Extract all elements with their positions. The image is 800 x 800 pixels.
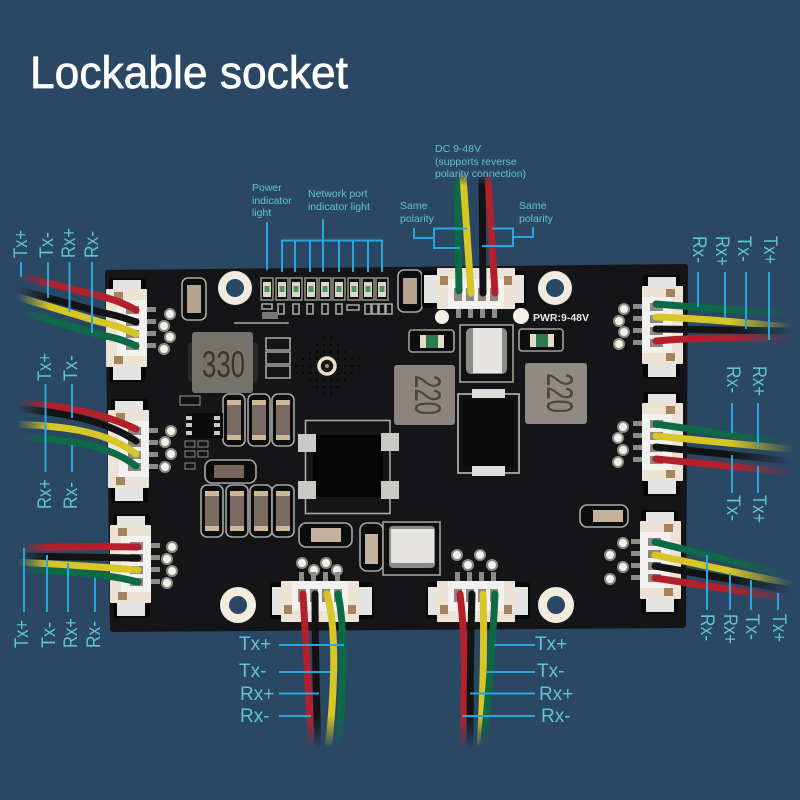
- inductor 220 left: [394, 365, 455, 425]
- labels: same polarity left: [400, 200, 467, 248]
- white capacitor top: [460, 325, 513, 382]
- small status LEDs: [409, 329, 563, 352]
- labels: right upper connector: Tx+: [759, 236, 780, 264]
- panel: circuit board: [108, 267, 685, 629]
- wires: left middle: [15, 403, 136, 466]
- labels: power indicator: light: [252, 207, 271, 219]
- labels: right middle connector: Tx+: [748, 495, 769, 523]
- labels: right middle connector: Rx-: [722, 366, 743, 393]
- labels: DC input: polarity connection): [435, 168, 526, 180]
- labels: left middle connector: Tx+: [35, 353, 56, 381]
- ceramic capacitors row bottom: [201, 485, 294, 537]
- labels: bottom right connector: [462, 634, 573, 727]
- labels: left lower connector: Rx-: [84, 621, 105, 648]
- labels: right upper connector: Rx-: [688, 236, 709, 263]
- labels: bottom right connector: Rx+: [539, 684, 573, 705]
- horizontal capacitor: [205, 460, 256, 483]
- solder pads: [159, 304, 629, 588]
- ceramic capacitors row top: [223, 394, 294, 446]
- labels: right lower connector: Rx+: [719, 614, 740, 644]
- labels: bottom left connector: Tx+: [239, 634, 271, 655]
- labels: DC input: DC 9-48V: [435, 143, 481, 155]
- diode: [458, 389, 519, 476]
- labels: power indicator: indicator: [252, 195, 292, 207]
- labels: left lower connector: Rx+: [61, 618, 82, 648]
- labels: power indicator: [252, 182, 292, 270]
- small IC: [180, 322, 290, 469]
- labels: same polarity right: Same: [519, 200, 547, 212]
- inductor 330: 330: [202, 344, 245, 385]
- labels: network port indicator: Network port: [308, 188, 368, 200]
- labels: bottom right connector: Rx-: [541, 706, 571, 727]
- labels: right lower connector: Rx-: [696, 614, 717, 641]
- indicator LEDs: [261, 278, 392, 319]
- inductor 220 right: 220: [539, 373, 580, 413]
- labels: same polarity left: Same: [400, 200, 428, 212]
- wires: left lower: [15, 547, 138, 582]
- labels: bottom right connector: Tx+: [535, 634, 567, 655]
- inductor 330: [188, 332, 258, 393]
- labels: right lower connector: [696, 555, 789, 644]
- wire fade overlays: [0, 172, 800, 760]
- labels: bottom right connector: Tx-: [537, 661, 564, 682]
- wires: bottom right: [460, 594, 495, 752]
- labels: left upper connector: Rx-: [82, 231, 103, 258]
- capacitor top left: [182, 278, 206, 320]
- labels: same polarity left: polarity: [400, 213, 435, 225]
- mounting holes: [221, 274, 571, 620]
- labels: right lower connector: Tx-: [741, 614, 762, 640]
- PWR marking: PWR:9-48V: [533, 312, 589, 324]
- inductor 220 left: 220: [407, 375, 448, 415]
- wires: left upper: [15, 276, 136, 346]
- labels: right middle connector: Rx+: [748, 366, 769, 396]
- labels: left lower connector: Tx+: [12, 620, 33, 648]
- labels: right lower connector: Tx+: [768, 614, 789, 642]
- labels: left upper connector: [11, 228, 103, 333]
- labels: left upper connector: Rx+: [59, 228, 80, 258]
- labels: DC input: [435, 143, 526, 180]
- center via: [319, 358, 335, 374]
- labels: same polarity right: polarity: [519, 213, 554, 225]
- labels: power indicator: Power: [252, 182, 282, 194]
- dotted via field: [288, 332, 366, 400]
- capacitor top middle: [398, 270, 422, 312]
- labels: left upper connector: Tx+: [11, 230, 32, 258]
- horizontal capacitor bottom: [299, 523, 352, 547]
- wires: power input: [457, 176, 495, 293]
- labels: network port indicator: [282, 188, 382, 272]
- labels: bottom left connector: Tx-: [239, 661, 266, 682]
- labels: left upper connector: Tx-: [37, 232, 58, 258]
- wires: right lower: [655, 542, 800, 597]
- labels: right middle connector: [722, 366, 769, 523]
- labels: left lower connector: [12, 548, 105, 648]
- vertical capacitor bottom: [360, 523, 383, 571]
- wires: right middle: [656, 424, 800, 473]
- inductor 220 right: [525, 363, 587, 424]
- labels: DC input: (supports reverse: [435, 156, 517, 168]
- title: Lockable socket: [30, 47, 348, 98]
- labels: left lower connector: Tx-: [39, 622, 60, 648]
- labels: right upper connector: [688, 236, 780, 340]
- labels: right upper connector: Tx-: [733, 236, 754, 262]
- labels: left middle connector: Rx-: [61, 482, 82, 509]
- labels: left middle connector: [35, 353, 82, 509]
- labels: left middle connector: Rx+: [35, 479, 56, 509]
- PWR marking: [435, 308, 589, 324]
- capacitor right: [580, 505, 628, 527]
- labels: same polarity right: [482, 200, 554, 246]
- white capacitor bottom: [383, 522, 440, 575]
- labels: bottom left connector: [239, 634, 344, 727]
- labels: bottom left connector: Rx+: [240, 684, 274, 705]
- labels: left middle connector: Tx-: [61, 355, 82, 381]
- main chip: [298, 420, 399, 514]
- labels: network port indicator: indicator light: [308, 201, 370, 213]
- labels: right middle connector: Tx-: [722, 495, 743, 521]
- labels: right upper connector: Rx+: [711, 236, 732, 266]
- labels: bottom left connector: Rx-: [240, 706, 270, 727]
- wires: right upper: [656, 304, 800, 341]
- wires: bottom left: [303, 594, 343, 752]
- connectors: [106, 268, 683, 622]
